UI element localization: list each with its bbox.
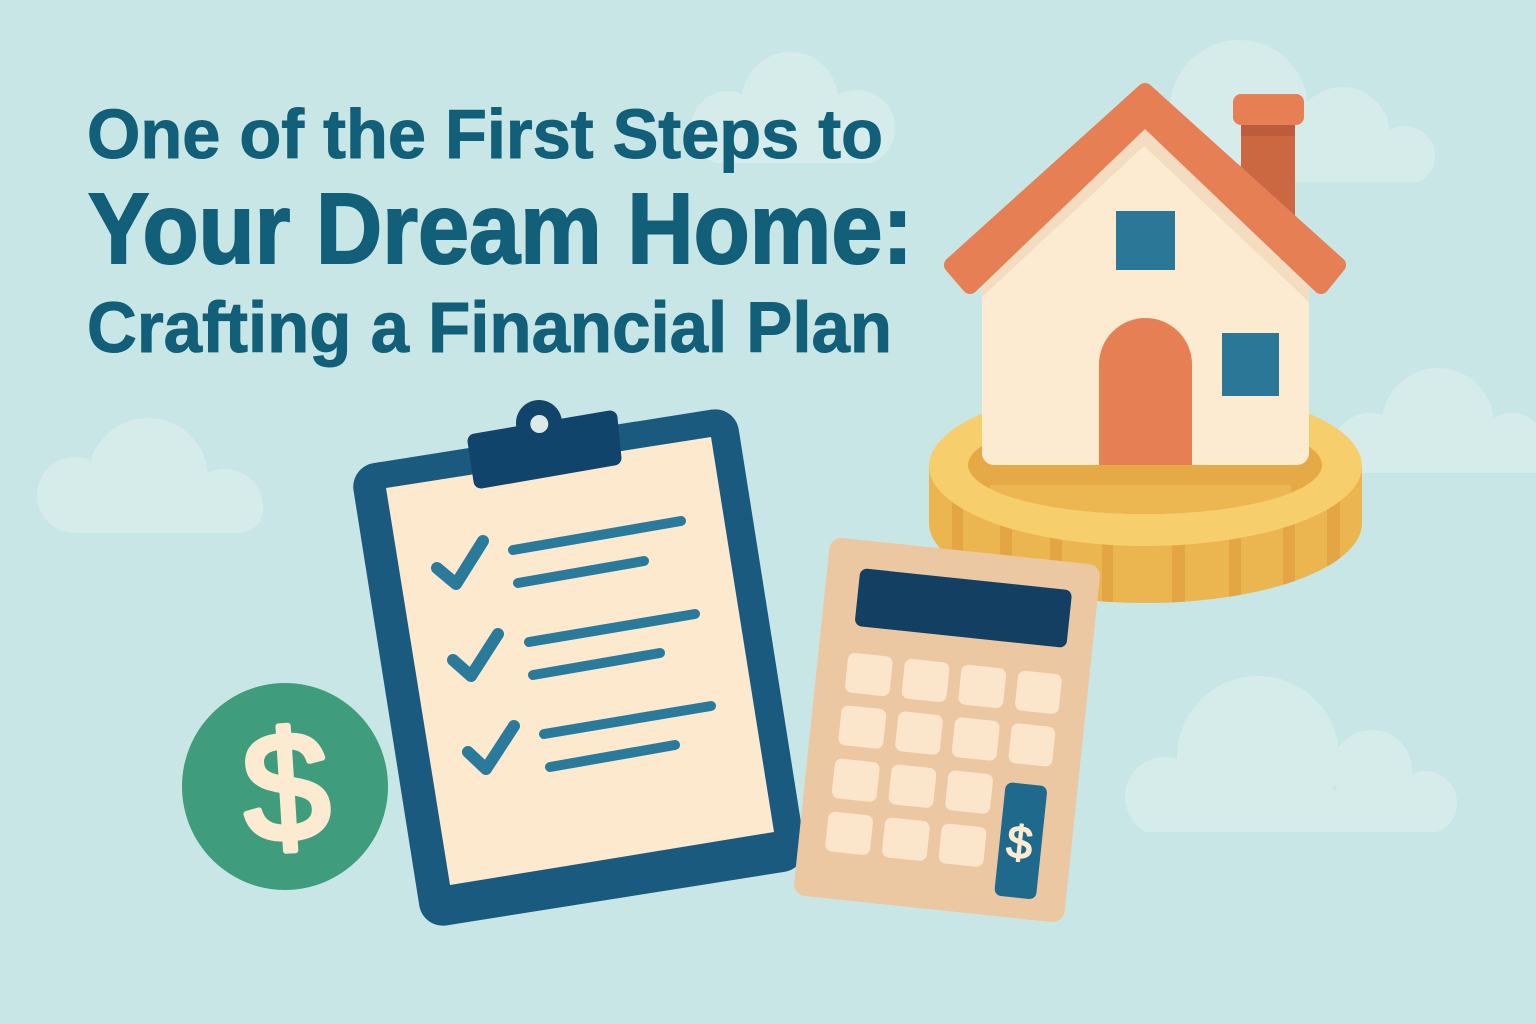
cloud: right [1338,368,1536,473]
calculator body [793,537,1101,923]
checklist item 3 [468,706,711,769]
title line 2: Your Dream Home: [88,173,913,285]
cloud: top centre [691,52,895,166]
dollar key symbol: $ [1004,815,1035,869]
cloud: bottom right [1125,676,1457,838]
checklist item 1 [437,521,681,584]
roof [952,91,1338,286]
roof underside shadow [982,126,1309,302]
coin [929,414,1362,603]
calculator [793,537,1101,923]
cloud: top right [1170,40,1435,186]
calculator display [854,568,1072,648]
checklist item 2 [453,614,695,676]
dollar sign: $ [238,699,334,875]
cloud: left [37,418,263,545]
title [87,95,913,368]
title line 3: Crafting a Financial Plan [87,289,892,368]
upper window [1116,211,1175,270]
door [1099,318,1192,465]
dollar key [994,782,1048,900]
clipboard clip [475,400,614,481]
chimney [1233,94,1304,230]
icon: dollar coin [182,683,388,890]
illustration: house on coin [929,91,1362,610]
lower window [1222,333,1279,396]
house body [982,130,1309,465]
clipboard paper [386,437,774,885]
calculator keys [825,652,1062,874]
title line 1: One of the First Steps to [87,95,883,173]
clipboard [350,400,808,929]
clipboard board [350,406,808,929]
